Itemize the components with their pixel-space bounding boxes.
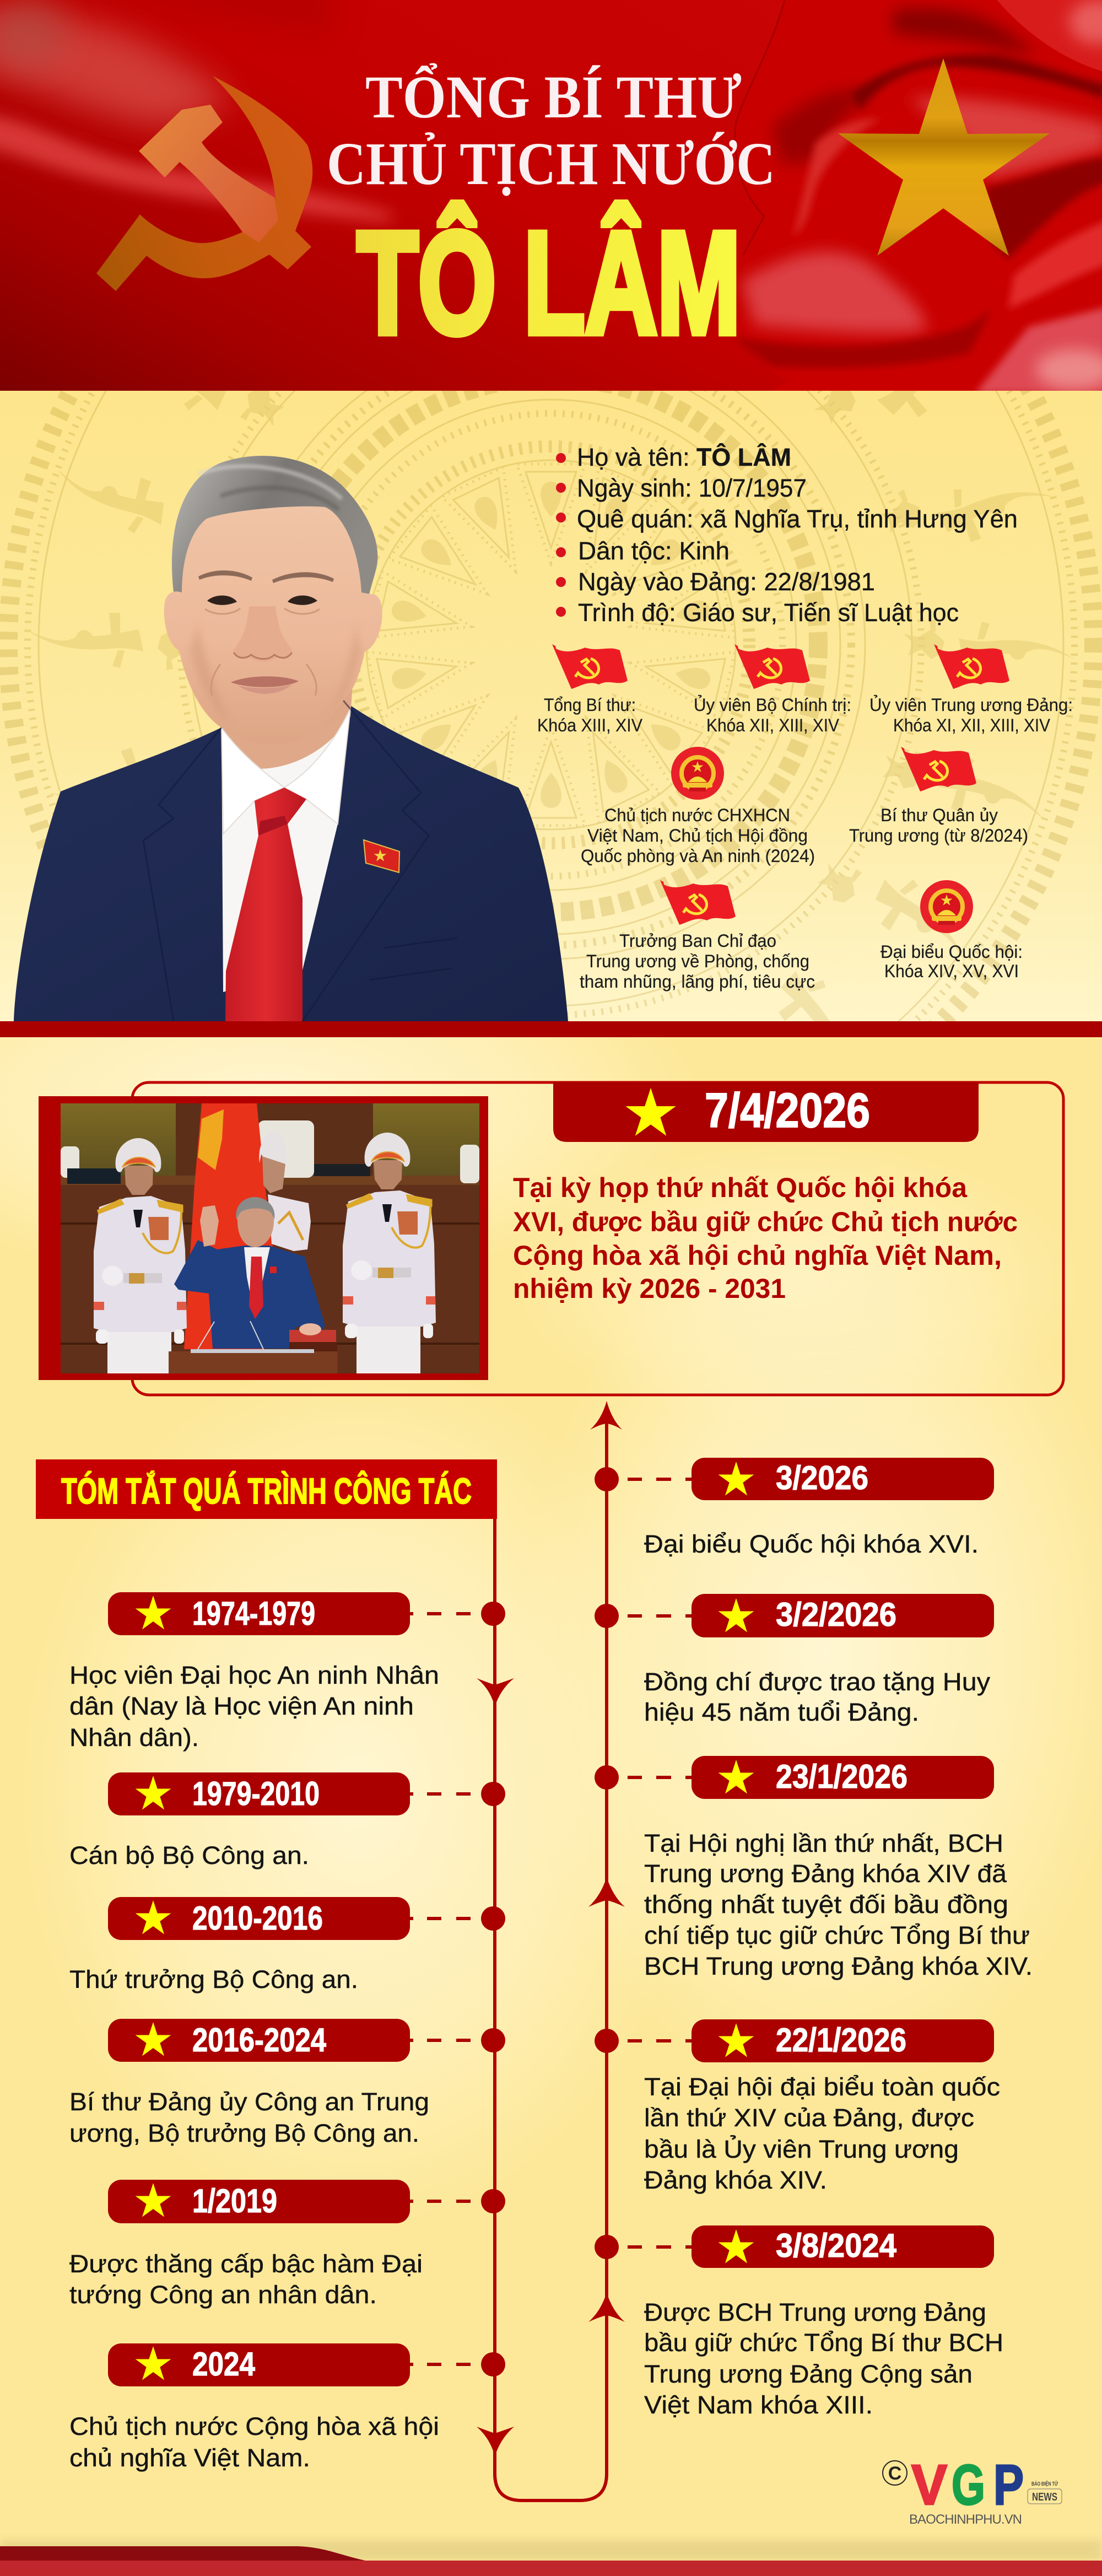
timeline item: 2016-2024: Bí thư Đảng ủy Công an Trung — [69, 2088, 429, 2116]
arrow: right up 1 — [588, 1877, 625, 1907]
logo: VGP News: BÁO ĐIỆN TỬ — [1031, 2480, 1058, 2487]
position: state president — [581, 747, 815, 866]
necktie — [225, 788, 306, 1021]
logo: VGP News: V — [911, 2453, 947, 2516]
timeline item: 3/2026 — [595, 1458, 994, 1558]
position: national assembly deputy: Khóa XIV, XV, XVI — [884, 961, 1019, 981]
bullets — [556, 453, 566, 617]
photo frame — [39, 1096, 488, 1380]
timeline item: 1979-2010: Cán bộ Bộ Công an. — [69, 1841, 309, 1869]
timeline item: 1/2019 — [69, 2180, 505, 2309]
logo: VGP News — [883, 2453, 1062, 2527]
timeline item: 2016-2024: 2016-2024 — [192, 2022, 327, 2058]
timeline item: 3/8/2024: Được BCH Trung ương Đảng — [644, 2298, 986, 2326]
position: politburo: Ủy viên Bộ Chính trị: — [694, 695, 851, 715]
date heading: 7/4/2026 — [705, 1083, 870, 1138]
heading: career summary: TÓM TẮT QUÁ TRÌNH CÔNG TÁC — [61, 1470, 472, 1511]
timeline item: 1974-1979: dân (Nay là Học viện An ninh — [69, 1692, 414, 1720]
timeline item: 1979-2010 — [69, 1772, 505, 1869]
timeline item: 23/1/2026 — [595, 1756, 1033, 1980]
timeline item: 22/1/2026: 22/1/2026 — [776, 2022, 906, 2058]
position: national assembly deputy — [880, 880, 1023, 981]
position: anti-corruption steering committee: tham nhũng, lãng phí, tiêu cực — [580, 972, 815, 991]
title line 1: TỔNG BÍ THƯ — [365, 63, 742, 131]
position: central committee — [869, 644, 1073, 735]
timeline item: 23/1/2026: Tại Hội nghị lần thứ nhất, BCH — [644, 1829, 1003, 1857]
date tab — [553, 1082, 979, 1142]
logo: VGP News: P — [993, 2453, 1024, 2516]
logo: VGP News: BAOCHINHPHU.VN — [909, 2512, 1022, 2527]
timeline item: 23/1/2026: Trung ương Đảng khóa XIV đã — [644, 1860, 1007, 1888]
timeline item: 3/2026: Đại biểu Quốc hội khóa XVI. — [644, 1530, 979, 1558]
timeline item: 2010-2016: Thứ trưởng Bộ Công an. — [69, 1965, 358, 1993]
timeline item: 3/8/2024: Việt Nam khóa XIII. — [644, 2391, 873, 2419]
position: general secretary: Tổng Bí thư: — [544, 695, 636, 715]
portrait — [14, 456, 568, 1021]
president — [174, 1197, 325, 1349]
timeline item: 1/2019: 1/2019 — [192, 2182, 277, 2219]
timeline item: 2010-2016: 2010-2016 — [192, 1900, 323, 1937]
timeline item: 2024: Chủ tịch nước Cộng hòa xã hội — [69, 2412, 439, 2440]
position: anti-corruption steering committee: Trung ương về Phòng, chống — [586, 951, 809, 971]
logo: VGP News: C — [888, 2463, 901, 2484]
timeline item: 23/1/2026: chí tiếp tục giữ chức Tổng Bí thư — [644, 1921, 1030, 1949]
icon: yellow star — [838, 58, 1050, 256]
lapel pin — [364, 840, 399, 872]
divider band — [0, 1021, 1102, 1037]
footer band — [0, 2540, 1102, 2576]
logo: VGP News: G — [952, 2453, 985, 2516]
middle guard — [259, 1131, 311, 1251]
position: anti-corruption steering committee: Trưởng Ban Chỉ đạo — [619, 931, 776, 951]
highlight text — [513, 1172, 1018, 1304]
timeline item: 22/1/2026: Tại Đại hội đại biểu toàn quốc — [644, 2073, 1000, 2101]
timeline item: 1974-1979 — [69, 1592, 505, 1752]
arrow: top up — [590, 1401, 622, 1430]
arrow: right up 2 — [588, 2293, 625, 2322]
timeline item: 1974-1979: Nhân dân). — [69, 1723, 199, 1752]
timeline item: 23/1/2026: BCH Trung ương Đảng khóa XIV. — [644, 1952, 1033, 1980]
timeline item: 3/2/2026: 3/2/2026 — [776, 1596, 896, 1633]
position: politburo — [694, 644, 851, 735]
timeline item: 2016-2024: ương, Bộ trưởng Bộ Công an. — [69, 2119, 419, 2147]
position: general secretary: Khóa XIII, XIV — [537, 715, 643, 735]
date of birth: Ngày sinh: 10/7/1957 — [577, 474, 807, 502]
timeline item: 22/1/2026: Đảng khóa XIV. — [644, 2166, 827, 2194]
highlight text: XVI, được bầu giữ chức Chủ tịch nước — [513, 1206, 1018, 1237]
heading: career summary — [36, 1459, 497, 1519]
face — [164, 506, 382, 745]
ethnicity: Dân tộc: Kinh — [578, 537, 730, 565]
timeline item: 2024: chủ nghĩa Việt Nam. — [69, 2444, 310, 2472]
logo: VGP News: NEWS — [1032, 2491, 1057, 2503]
title line 2: CHỦ TỊCH NƯỚC — [327, 130, 775, 197]
timeline item: 3/8/2024 — [595, 2225, 1003, 2419]
title name: TÔ LÂM — [357, 202, 741, 364]
position: state president: Quốc phòng và An ninh (2024) — [581, 846, 815, 866]
position: military commission: Bí thư Quân ủy — [880, 805, 998, 825]
icon: tab star — [625, 1088, 676, 1136]
timeline item: 23/1/2026: 23/1/2026 — [776, 1758, 907, 1795]
timeline item: 22/1/2026 — [595, 2019, 1000, 2194]
highlight text: nhiệm kỳ 2026 - 2031 — [513, 1273, 786, 1304]
icon: hammer and sickle — [96, 76, 312, 291]
highlight text: Cộng hòa xã hội chủ nghĩa Việt Nam, — [513, 1240, 1002, 1271]
timeline item: 2024: 2024 — [192, 2346, 256, 2383]
timeline item: 3/8/2024: 3/8/2024 — [776, 2227, 897, 2264]
timeline item: 23/1/2026: thống nhất tuyệt đối bầu đồng — [644, 1890, 1008, 1918]
panel: lower background — [0, 920, 1102, 2576]
right guard — [343, 1133, 436, 1375]
position: general secretary — [537, 644, 643, 735]
facial features — [190, 570, 361, 725]
position: state president: Chủ tịch nước CHXHCN — [604, 805, 790, 825]
timeline item: 3/2026: 3/2026 — [776, 1459, 868, 1496]
shirt collar — [222, 708, 350, 834]
neck — [222, 683, 353, 769]
timeline item: 1974-1979: Học viên Đại học An ninh Nhân — [69, 1661, 439, 1689]
timeline item: 3/2/2026: hiệu 45 năm tuổi Đảng. — [644, 1698, 919, 1726]
panel: 7/4/2026 highlight — [39, 1082, 1063, 1395]
position: military commission: Trung ương (từ 8/2024) — [849, 826, 1028, 845]
positions grid — [537, 644, 1073, 991]
photo: swearing-in ceremony — [61, 1103, 479, 1381]
timeline item: 3/8/2024: bầu giữ chức Tổng Bí thư BCH — [644, 2329, 1003, 2357]
education: Trình độ: Giáo sư, Tiến sĩ Luật học — [578, 599, 959, 627]
timeline item: 3/2/2026 — [595, 1594, 994, 1726]
flag folds right — [733, 0, 1102, 394]
left guard — [94, 1138, 187, 1381]
timeline item: 1/2019: Được thăng cấp bậc hàm Đại — [69, 2250, 423, 2278]
position: state president: Việt Nam, Chủ tịch Hội đồng — [587, 826, 808, 845]
arrow: left down 2 — [477, 2427, 514, 2456]
timeline item: 2010-2016 — [69, 1897, 505, 1993]
timeline spine — [495, 1416, 607, 2500]
position: central committee: Khóa XI, XII, XIII, XIV — [893, 715, 1051, 735]
timeline item: 3/2/2026: Đồng chí được trao tặng Huy — [644, 1668, 991, 1696]
timeline item: 2016-2024 — [69, 2019, 505, 2147]
flag — [184, 1103, 276, 1349]
info list — [556, 443, 1018, 627]
hometown: Quê quán: xã Nghĩa Trụ, tỉnh Hưng Yên — [577, 505, 1018, 533]
timeline item: 1/2019: tướng Công an nhân dân. — [69, 2281, 377, 2309]
timeline item: 22/1/2026: lần thứ XIV của Đảng, được — [644, 2104, 974, 2132]
shirt — [222, 708, 350, 992]
suit jacket — [14, 700, 568, 1021]
timeline item: 22/1/2026: bầu là Ủy viên Trung ương — [644, 2135, 959, 2163]
position: anti-corruption steering committee — [580, 880, 815, 991]
podium — [169, 1321, 337, 1373]
arrow: left down 1 — [477, 1678, 514, 1707]
timeline item: 1974-1979: 1974-1979 — [192, 1595, 315, 1632]
panel: profile background with drum pattern — [0, 102, 1102, 1188]
header banner — [0, 0, 1102, 394]
full name: Họ và tên: TÔ LÂM — [577, 443, 791, 471]
party date: Ngày vào Đảng: 22/8/1981 — [578, 568, 875, 596]
highlight text: Tại kỳ họp thứ nhất Quốc hội khóa — [513, 1172, 968, 1203]
timeline item: 3/8/2024: Trung ương Đảng Cộng sản — [644, 2360, 973, 2388]
position: military commission — [849, 747, 1028, 845]
position: central committee: Ủy viên Trung ương Đảng: — [869, 695, 1073, 715]
timeline item: 2024 — [69, 2343, 505, 2472]
timeline item: 1979-2010: 1979-2010 — [192, 1775, 320, 1812]
position: national assembly deputy: Đại biểu Quốc hội: — [880, 942, 1023, 962]
hair — [172, 456, 377, 598]
outline box — [132, 1082, 1063, 1395]
position: politburo: Khóa XII, XIII, XIV — [706, 715, 840, 735]
jacket lapels — [143, 700, 457, 1021]
